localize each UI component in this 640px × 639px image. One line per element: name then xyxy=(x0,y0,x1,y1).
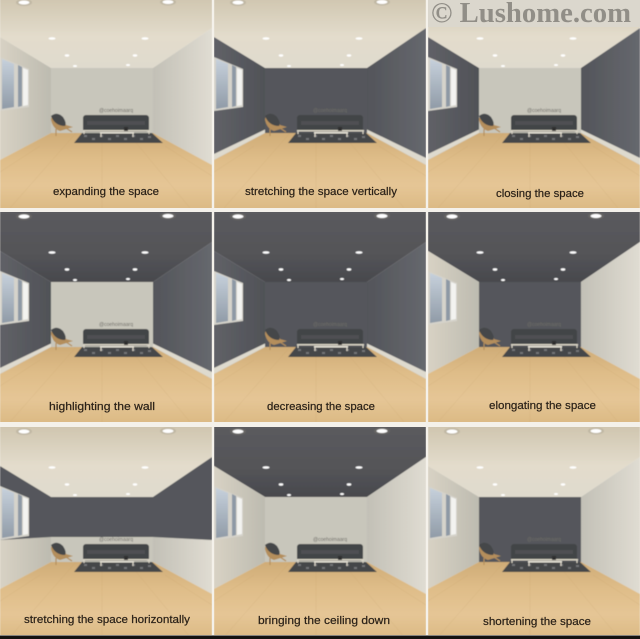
watermark band xyxy=(428,0,640,27)
panel: stretching the space horizontally xyxy=(0,425,212,639)
panel: decreasing the space xyxy=(214,210,426,424)
caption: elongating the space: elongating the space xyxy=(489,400,596,412)
panel: expanding the space: @coehoimaarq xyxy=(99,108,133,114)
panel: bringing the ceiling down xyxy=(214,425,426,639)
panel: closing the space: @coehoimaarq xyxy=(527,108,561,114)
panel: stretching the space horizontally: @coehoimaarq xyxy=(99,537,133,543)
panel: shortening the space: @coehoimaarq xyxy=(527,537,561,543)
panel: stretching the space vertically xyxy=(214,0,426,210)
caption: shortening the space: shortening the space xyxy=(483,616,591,628)
panel: stretching the space vertically: @coehoimaarq xyxy=(313,108,347,114)
panel: shortening the space xyxy=(428,425,640,639)
caption: stretching the space horizontally: stretching the space horizontally xyxy=(24,614,191,626)
panel: expanding the space xyxy=(0,0,212,210)
caption: bringing the ceiling down: bringing the ceiling down xyxy=(258,615,390,627)
panel: elongating the space: @coehoimaarq xyxy=(527,322,561,328)
caption: stretching the space vertically: stretching the space vertically xyxy=(245,186,398,198)
caption: highlighting the wall: highlighting the wall xyxy=(49,401,155,413)
caption: decreasing the space: decreasing the space xyxy=(267,401,375,413)
panel: bringing the ceiling down: @coehoimaarq xyxy=(313,537,347,543)
panel: elongating the space xyxy=(428,210,640,424)
bottom dark edge xyxy=(0,636,640,639)
caption: closing the space: closing the space xyxy=(496,188,584,200)
panel: decreasing the space: @coehoimaarq xyxy=(313,322,347,328)
panel: highlighting the wall xyxy=(0,210,212,424)
panel: highlighting the wall: @coehoimaarq xyxy=(99,322,133,328)
panel: closing the space xyxy=(428,27,640,208)
caption: expanding the space: expanding the space xyxy=(53,186,159,198)
